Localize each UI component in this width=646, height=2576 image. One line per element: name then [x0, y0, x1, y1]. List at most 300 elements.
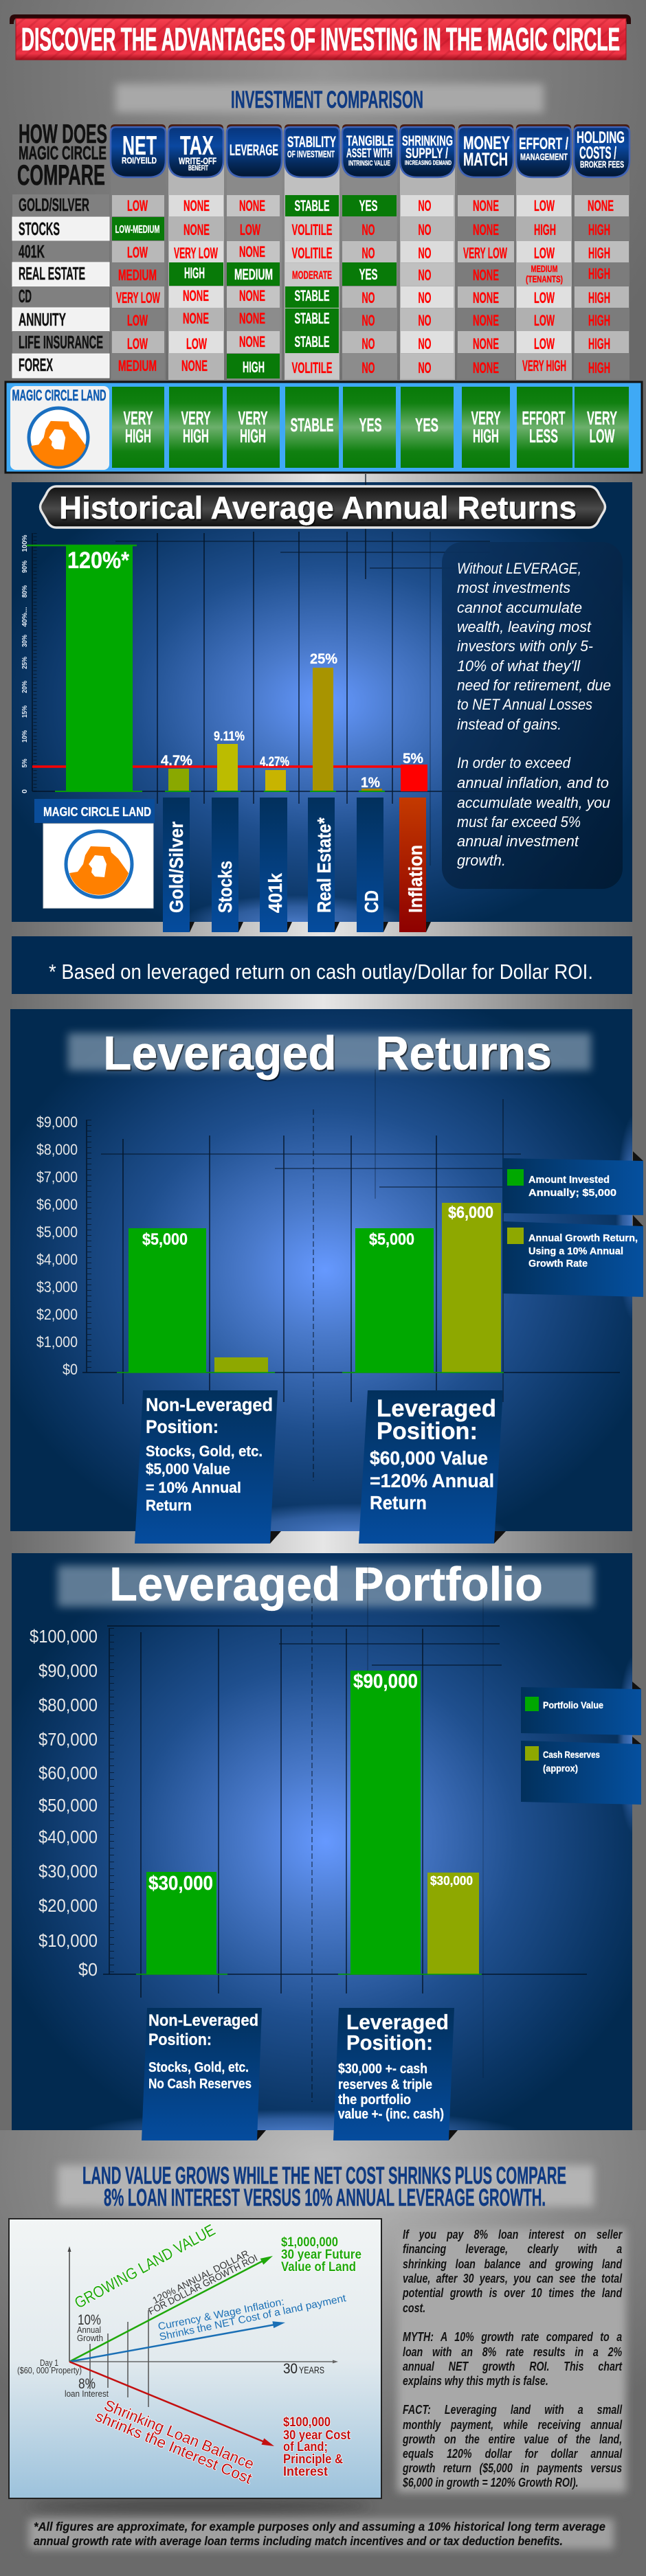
- explanatory text block: cost.: [403, 2301, 425, 2315]
- row: real estate: MEDIUM: [118, 267, 157, 284]
- diagram labels: shrinks the Interest Cost: [93, 2408, 254, 2487]
- row: real estate: MODERATE: [292, 269, 332, 282]
- y axis labels: $5,000: [36, 1223, 78, 1241]
- diagram labels: Currency & Wage Inflation:: [157, 2296, 285, 2333]
- table column stripes: [111, 165, 630, 380]
- row: annuity: LOW: [127, 312, 148, 329]
- green result cells: VERY: [181, 407, 211, 429]
- panel: footnote: * Based on leveraged return on cash outlay/Dollar for Dollar ROI.: [49, 960, 593, 984]
- row: real estate: NONE: [473, 267, 499, 284]
- row: stocks: LOW-MEDIUM: [115, 224, 159, 236]
- row: life insurance: LOW: [186, 335, 207, 352]
- legend: cash reserves: Cash Reserves: [543, 1749, 600, 1760]
- green result cells: HIGH: [183, 425, 209, 447]
- heading: how does magic circle compare: MAGIC CIRCLE: [19, 142, 107, 163]
- ribbon: 401k: [260, 798, 292, 932]
- y axis labels: $30,000: [38, 1861, 98, 1882]
- info callout: 10% of what they'll: [457, 657, 581, 675]
- legend: annual growth return: Using a 10% Annual: [528, 1245, 623, 1257]
- tab: money match: MONEY: [463, 133, 510, 153]
- title: Leveraged Returns: [103, 1026, 552, 1080]
- row: gold/silver: LOW: [534, 197, 555, 214]
- row: gold/silver: [12, 194, 629, 216]
- row: cd: STABLE: [294, 287, 330, 304]
- row: 401k: NONE: [239, 243, 265, 260]
- callout: non-leveraged position: Non-Leveraged: [146, 1394, 273, 1415]
- info callout: wealth, leaving most: [457, 618, 592, 635]
- diagram labels: Principle &: [283, 2452, 343, 2467]
- y axis labels: $50,000: [38, 1795, 98, 1816]
- arrow: inflation: [69, 2321, 285, 2362]
- info callout: to NET Annual Losses: [457, 696, 592, 713]
- row: 401k: NO: [361, 245, 375, 262]
- explanatory text block: loan with an 8% rate results in a 2%: [403, 2345, 622, 2359]
- bar chart: [117, 1203, 504, 1372]
- disclaimer: *All figures are approximate, for example purposes only and assuming a 10% historical long term average: [34, 2520, 605, 2533]
- diagram: land value versus cost: [9, 2219, 381, 2512]
- diagram labels: FOR DOLLAR GROWTH ROI: [146, 2252, 259, 2317]
- arrow: land value growth: [69, 2256, 273, 2362]
- bar chart: 25%: [310, 651, 337, 667]
- callout: leveraged position: value +- (inc. cash): [338, 2107, 444, 2122]
- explanatory text block: financing leverage, clearly with a: [403, 2242, 622, 2256]
- ribbon: inflation: [399, 798, 431, 932]
- tab: effort management: [516, 124, 571, 177]
- chart grid lines: [32, 474, 490, 866]
- explanatory text block: If you pay 8% loan interest on seller: [403, 2228, 622, 2241]
- magic circle land row: [5, 382, 642, 473]
- row: 401k: VOLITILE: [291, 245, 333, 262]
- row: cd: [12, 286, 629, 308]
- explanatory text block: shrinking loan balance and growing land: [403, 2257, 622, 2271]
- tab: stability: [285, 124, 339, 177]
- y axis labels: $0: [63, 1361, 78, 1378]
- tab: tax write-off: [168, 124, 223, 177]
- diagram labels: 30 year Cost: [283, 2428, 351, 2443]
- bar chart: $5,000: [369, 1230, 414, 1249]
- y axis labels: $9,000: [36, 1114, 78, 1131]
- logo cell: MAGIC CIRCLE LAND: [12, 387, 106, 404]
- row: real estate: HIGH: [184, 264, 205, 282]
- chart grid lines: [103, 1566, 587, 2102]
- row: 401k: [12, 241, 629, 262]
- green result cells: VERY: [124, 407, 153, 429]
- row: annuity: NO: [361, 312, 375, 329]
- row: forex: VERY HIGH: [522, 357, 566, 374]
- diagram labels: ($60, 000 Property): [17, 2365, 82, 2375]
- row: forex: VOLITILE: [291, 359, 333, 376]
- y axis labels: $40,000: [38, 1827, 98, 1847]
- diagram labels: $100,000: [283, 2415, 331, 2430]
- bar chart: $6,000: [448, 1204, 493, 1222]
- row: real estate: NO: [418, 267, 432, 284]
- diagram labels: 10%: [78, 2312, 101, 2328]
- explanatory text block: potential growth is over 10 times the land: [403, 2286, 622, 2300]
- row: life insurance: LOW: [127, 335, 148, 352]
- row: cd: HIGH: [588, 289, 610, 306]
- y axis labels: 10%: [21, 730, 29, 743]
- panel: footnote: [12, 936, 632, 994]
- y axis labels: 5%: [21, 758, 29, 768]
- callout: non-leveraged position: = 10% Annual: [146, 1479, 241, 1496]
- row: 401k: HIGH: [588, 245, 610, 262]
- row: stocks: VOLITILE: [291, 221, 333, 238]
- row: 401k: VERY LOW: [174, 245, 218, 262]
- callout: leveraged position: Leveraged: [377, 1395, 496, 1422]
- row: cd: NO: [361, 289, 375, 306]
- y axis labels: 80%: [21, 585, 29, 598]
- arrow: shrinking cost: [69, 2362, 274, 2446]
- callout: non-leveraged position: $5,000 Value: [146, 1460, 230, 1478]
- diagram labels: 120% ANNUAL DOLLAR: [151, 2248, 250, 2306]
- row: cd: VERY LOW: [116, 289, 160, 306]
- heading: land value grows: [58, 2162, 594, 2211]
- bar chart: $30,000: [430, 1874, 473, 1888]
- tab: shrinking supply: SUPPLY /: [405, 146, 448, 161]
- callout: leveraged position: $60,000 Value: [370, 1447, 488, 1469]
- y axis labels: $8,000: [36, 1141, 78, 1158]
- legend: annual growth return: Growth Rate: [528, 1258, 588, 1269]
- callout: leveraged position: Position:: [346, 2031, 433, 2055]
- green result cells: LESS: [529, 425, 558, 447]
- panel: leveraged returns: [10, 1009, 646, 1563]
- y axis labels: $70,000: [38, 1729, 98, 1750]
- y axis labels: $90,000: [38, 1660, 98, 1681]
- row: stocks: LOW: [240, 221, 260, 238]
- callout: leveraged position: =120% Annual: [370, 1470, 494, 1491]
- row: annuity: [12, 308, 629, 331]
- row: forex: NONE: [181, 357, 208, 374]
- row: 401k: LOW: [534, 245, 555, 262]
- legend: [502, 1151, 643, 1297]
- row: 401k: NO: [418, 245, 432, 262]
- row: annuity: LOW: [534, 312, 555, 329]
- diagram labels: Day 1: [40, 2358, 58, 2368]
- row: gold/silver: NONE: [473, 197, 499, 214]
- callout: leveraged position: [359, 1390, 506, 1544]
- row: life insurance: NONE: [239, 333, 265, 350]
- green result cells: [112, 387, 629, 468]
- green result cells: YES: [415, 414, 438, 436]
- y axis labels: 90%: [21, 560, 29, 573]
- row: real estate: HIGH: [588, 265, 610, 282]
- y axis labels: [30, 1626, 98, 1980]
- y axis labels: 15%: [21, 705, 29, 718]
- row: stocks: [12, 217, 629, 240]
- tab: tangible asset: [342, 124, 397, 177]
- row: cd: LOW: [534, 289, 555, 306]
- green result cells: VERY: [587, 407, 617, 429]
- diagram labels: GROWING LAND VALUE: [71, 2221, 218, 2312]
- ribbon: cd: [357, 798, 388, 932]
- chart grid lines: [82, 1070, 620, 1481]
- y axis labels: 20%: [21, 680, 29, 693]
- callout: non-leveraged position: No Cash Reserves: [148, 2077, 252, 2092]
- callout: leveraged position: $30,000 +- cash: [338, 2061, 427, 2077]
- row: 401k: LOW: [127, 244, 148, 261]
- callout: non-leveraged position: Position:: [146, 1416, 219, 1437]
- row: cd: NONE: [183, 287, 209, 304]
- row: gold/silver: STABLE: [294, 197, 330, 214]
- tab: holding costs: [574, 124, 630, 177]
- explanatory text block: growth on the entire value of the land,: [403, 2432, 622, 2446]
- title pill: Historical Average Annual Returns: [59, 490, 577, 526]
- panel: leveraged portfolio: [12, 1553, 646, 2156]
- bar chart: $90,000: [353, 1671, 418, 1693]
- row: 401k: VERY LOW: [463, 245, 507, 262]
- inflation line: [32, 765, 401, 768]
- tab: tax write-off: WRITE-OFF: [179, 155, 216, 166]
- row: annuity: NONE: [183, 310, 209, 327]
- info callout: cannot accumulate: [457, 599, 582, 616]
- y axis labels: $6,000: [36, 1196, 78, 1213]
- y axis labels: $4,000: [36, 1251, 78, 1268]
- row: life insurance: LIFE INSURANCE: [19, 332, 103, 352]
- tab: effort management: MANAGEMENT: [520, 151, 568, 162]
- row: stocks: HIGH: [534, 221, 556, 238]
- row: stocks: NONE: [183, 221, 210, 238]
- row: life insurance: NO: [361, 335, 375, 352]
- callout: non-leveraged position: [142, 2008, 266, 2140]
- diagram labels: Interest: [283, 2465, 328, 2479]
- tab: shrinking supply: [400, 124, 455, 177]
- tab: tax write-off: BENEFIT: [188, 164, 208, 172]
- tab: tangible asset: TANGIBLE: [346, 133, 394, 149]
- callout: leveraged position: Position:: [377, 1418, 478, 1445]
- row: cd: NONE: [473, 289, 499, 306]
- row: real estate: (TENANTS): [526, 273, 563, 284]
- row: annuity: NONE: [473, 312, 499, 329]
- row: forex: NO: [361, 359, 375, 376]
- legend: amount invested: [502, 1151, 643, 1215]
- row: life insurance: STABLE: [294, 333, 330, 350]
- row: stocks: HIGH: [588, 221, 610, 238]
- explanatory text block: growth return ($5,000 in payments versus: [403, 2461, 622, 2475]
- tab: leverage: LEVERAGE: [230, 142, 278, 159]
- explanatory text block: MYTH: A 10% growth rate compared to a: [403, 2330, 622, 2344]
- y axis labels: $7,000: [36, 1168, 78, 1186]
- tab: tax write-off: TAX: [180, 131, 214, 161]
- diagram labels: 30: [283, 2361, 298, 2377]
- y axis labels: 30%: [21, 634, 29, 647]
- y axis labels: $3,000: [36, 1278, 78, 1296]
- diagram labels: Growth: [77, 2333, 103, 2343]
- tab: money match: [458, 124, 513, 177]
- callout: non-leveraged position: Position:: [148, 2031, 212, 2049]
- row: stocks: NO: [361, 221, 375, 238]
- row: life insurance: HIGH: [588, 335, 610, 352]
- diagram labels: YEARS: [299, 2364, 324, 2375]
- row: 401k: 401K: [19, 241, 45, 262]
- row: real estate: REAL ESTATE: [19, 263, 85, 284]
- row: real estate: YES: [359, 266, 378, 283]
- tab: tangible asset: INTRINSIC VALUE: [348, 159, 390, 168]
- row: real estate: MEDIUM: [234, 266, 273, 283]
- callout: non-leveraged position: Stocks, Gold, etc.: [148, 2060, 249, 2075]
- info callout: accumulate wealth, you: [457, 794, 610, 811]
- callout: leveraged position: the portfolio: [338, 2092, 411, 2108]
- info callout: investors with only 5-: [457, 637, 593, 655]
- magic circle land badge: MAGIC CIRCLE LAND: [43, 805, 151, 819]
- diagram labels: loan Interest: [65, 2388, 109, 2399]
- legend: portfolio value: [521, 1682, 641, 1735]
- legend: amount invested: Amount Invested: [528, 1174, 610, 1186]
- explanatory text block: value, after 30 years, you can see the total: [403, 2272, 622, 2285]
- green result cells: EFFORT: [522, 407, 565, 429]
- info callout: growth.: [457, 852, 506, 869]
- comparison table rows: [12, 194, 629, 379]
- tab: tangible asset: ASSET WITH: [346, 146, 392, 160]
- y axis labels: $20,000: [38, 1895, 98, 1916]
- text panel backdrop: [397, 2228, 626, 2492]
- bar chart: 4.27%: [260, 755, 289, 769]
- legend: amount invested: Annually; $5,000: [528, 1187, 616, 1199]
- row: gold/silver: NONE: [588, 197, 614, 214]
- y axis labels: 25%: [21, 656, 29, 669]
- row: gold/silver: NONE: [183, 197, 210, 214]
- explanatory text block: equals 120% dollar for dollar annual: [403, 2447, 622, 2461]
- row: life insurance: NONE: [473, 335, 499, 352]
- row: life insurance: LOW: [534, 335, 555, 352]
- bar chart: 120%*: [67, 547, 130, 574]
- info callout: must far exceed 5%: [457, 813, 581, 831]
- green result cells: HIGH: [125, 425, 151, 447]
- bar chart: 5%: [403, 751, 423, 767]
- green result cells: VERY: [471, 407, 501, 429]
- explanatory text block: FACT: Leveraging land with a small: [403, 2403, 622, 2417]
- heading: how does magic circle compare: HOW DOES: [19, 120, 107, 149]
- callout: leveraged position: [333, 2008, 458, 2140]
- green result cells: HIGH: [240, 425, 266, 447]
- info callout: In order to exceed: [457, 754, 571, 771]
- bar chart: [136, 1671, 482, 1974]
- explanatory text block: annual NET growth ROI. This chart: [403, 2360, 622, 2373]
- y axis labels: $0: [78, 1959, 98, 1980]
- diagram labels: of Land;: [283, 2440, 328, 2454]
- row: gold/silver: NONE: [239, 197, 265, 214]
- info callout: [442, 542, 623, 889]
- heading: how does magic circle compare: [17, 120, 107, 191]
- diagram labels: 30 year Future: [281, 2248, 361, 2262]
- row: forex: MEDIUM: [118, 357, 157, 374]
- tab: net roi/yield: ROI/YEILD: [122, 155, 157, 166]
- legend: cash reserves: [521, 1737, 641, 1805]
- ribbon: inflation: Inflation: [405, 845, 426, 913]
- ribbon: stocks: Stocks: [214, 861, 236, 913]
- legend: portfolio value: Portfolio Value: [543, 1699, 603, 1710]
- ribbon: stocks: [212, 798, 243, 932]
- tab: shrinking supply: INCREASING DEMAND: [405, 159, 452, 166]
- tab: leverage: [227, 124, 282, 177]
- row: real estate: MEDIUM: [531, 263, 558, 274]
- row: cd: CD: [19, 286, 32, 306]
- bar chart: 1%: [361, 775, 380, 791]
- heading: how does magic circle compare: COMPARE: [17, 159, 105, 191]
- row: forex: HIGH: [588, 359, 610, 376]
- y axis labels: 0: [21, 789, 29, 793]
- row: forex: NO: [418, 359, 432, 376]
- heading: investment comparison: INVESTMENT COMPARISON: [231, 87, 423, 113]
- callout: leveraged position: Return: [370, 1492, 427, 1513]
- panel: historical average annual returns: [12, 474, 632, 953]
- info callout: instead of gains.: [457, 716, 561, 733]
- tab: stability: STABILITY: [287, 133, 336, 150]
- green result cells: STABLE: [290, 414, 334, 436]
- legend: [521, 1682, 641, 1805]
- y axis labels: [21, 534, 29, 793]
- explanatory text block: $6,000 in growth = 120% Growth ROI).: [403, 2476, 579, 2489]
- bar chart: $5,000: [142, 1230, 188, 1249]
- y axis labels: $2,000: [36, 1306, 78, 1323]
- tab: shrinking supply: SHRINKING: [402, 133, 453, 149]
- green result cells: HIGH: [473, 425, 499, 447]
- diagram labels: Annual: [77, 2325, 101, 2335]
- ribbon: gold/silver: Gold/Silver: [166, 822, 187, 913]
- tab: money match: MATCH: [463, 149, 508, 170]
- callout: leveraged position: Leveraged: [346, 2010, 449, 2034]
- legend: annual growth return: [502, 1215, 643, 1297]
- green result cells: VERY: [238, 407, 268, 429]
- diagram labels: Value of Land: [281, 2260, 356, 2274]
- y axis labels: 100%: [21, 534, 29, 552]
- green result cells: LOW: [590, 425, 615, 447]
- legend: cash reserves: (approx): [543, 1763, 578, 1774]
- legend: annual growth return: Annual Growth Return,: [528, 1232, 638, 1244]
- explanatory text block: monthly payment, while receiving annual: [403, 2418, 622, 2432]
- info callout: annual investment: [457, 833, 579, 850]
- ribbon: real estate: [308, 798, 339, 932]
- row: forex: NONE: [473, 359, 499, 376]
- ribbon: real estate: Real Estate*: [313, 817, 335, 913]
- row: annuity: NO: [418, 312, 432, 329]
- tab: net roi/yield: NET: [122, 131, 157, 161]
- row: stocks: STOCKS: [19, 218, 60, 239]
- bar chart: 4.7%: [161, 753, 192, 769]
- explanatory text block: [403, 2228, 623, 2489]
- ribbon: gold/silver: [163, 798, 194, 932]
- callout: non-leveraged position: Return: [146, 1497, 192, 1514]
- row: annuity: STABLE: [294, 310, 330, 327]
- heading: investment comparison: [115, 84, 544, 113]
- info callout: annual inflation, and to: [457, 774, 609, 791]
- row: stocks: NONE: [473, 221, 499, 238]
- ribbon: cd: CD: [361, 890, 382, 913]
- disclaimer: [29, 2519, 614, 2549]
- bar chart: 9.11%: [214, 730, 245, 744]
- y axis labels: $1,000: [36, 1333, 78, 1351]
- row: gold/silver: LOW: [127, 197, 148, 214]
- category ribbons: [163, 798, 431, 932]
- y axis labels: $80,000: [38, 1695, 98, 1715]
- row: life insurance: [12, 331, 629, 353]
- tab: stability: OF INVESTMENT: [287, 148, 335, 159]
- ribbon: 401k: 401k: [265, 873, 286, 913]
- green result cells: YES: [359, 414, 382, 436]
- tab: effort management: EFFORT /: [519, 135, 568, 153]
- bar chart: [27, 545, 427, 791]
- diagram labels: [17, 2221, 361, 2487]
- tab: net roi/yield: [111, 124, 166, 177]
- y axis labels: $60,000: [38, 1763, 98, 1783]
- diagram labels: Shrinks the NET Cost of a land payment: [158, 2292, 348, 2343]
- row: gold/silver: GOLD/SILVER: [19, 194, 89, 215]
- info callout: Without LEVERAGE,: [457, 560, 581, 577]
- row: annuity: ANNUITY: [19, 309, 66, 330]
- row: forex: FOREX: [19, 354, 53, 375]
- disclaimer: annual growth rate with average loan terms including match incentives and or tax deduction benefits.: [34, 2534, 563, 2548]
- row: gold/silver: YES: [359, 197, 378, 214]
- diagram labels: 8%: [78, 2376, 96, 2392]
